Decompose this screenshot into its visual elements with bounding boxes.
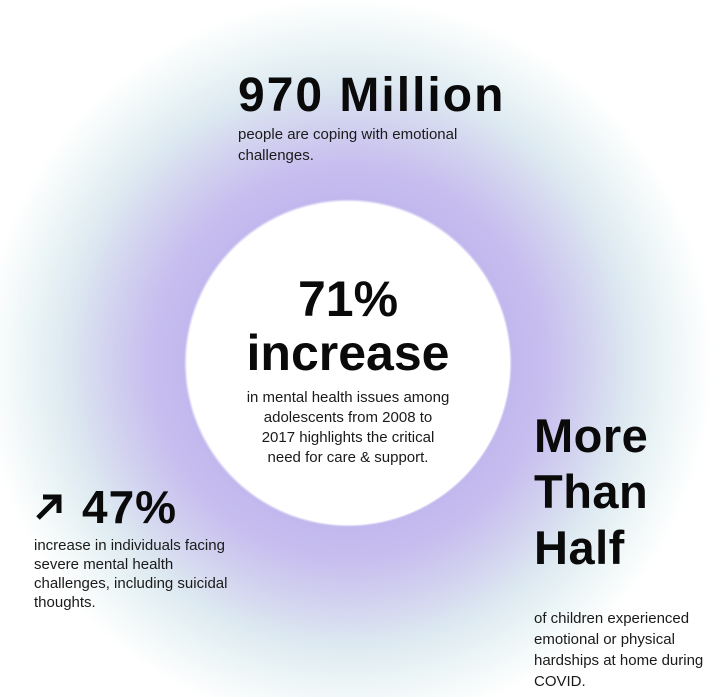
stat: More Than Half: COVID. [534, 673, 586, 690]
stat: 47%: 47% [82, 481, 177, 533]
stat: 47% [34, 481, 227, 611]
stat: 47%: challenges, including suicidal [34, 575, 227, 592]
stat: 71% increase: need for care & support. [268, 449, 428, 466]
stat: 71% increase: increase [247, 325, 449, 381]
icon: arrow up-right [36, 494, 62, 520]
stat: More Than Half: Than [534, 465, 648, 518]
stat: 970 Million [238, 69, 505, 164]
stat: 970 Million: challenges. [238, 147, 314, 164]
stat: 71% increase: adolescents from 2008 to [264, 409, 432, 426]
stat: More Than Half: More [534, 409, 648, 462]
stat: More Than Half: of children experienced [534, 610, 689, 627]
stat: 71% increase: 2017 highlights the critical [262, 429, 434, 446]
stat: More Than Half: emotional or physical [534, 631, 675, 648]
stat: 71% increase: in mental health issues among [247, 389, 449, 406]
stat: 47%: increase in individuals facing [34, 537, 225, 554]
stat: More Than Half: hardships at home during [534, 652, 703, 669]
stat: 970 Million: people are coping with emotional [238, 126, 457, 143]
stat: 71% increase: 71% [298, 271, 398, 327]
stat: 970 Million: 970 Million [238, 69, 505, 122]
stat: 71% increase [247, 271, 449, 466]
stat: More Than Half [534, 409, 703, 690]
stat: 47%: thoughts. [34, 594, 96, 611]
center circle [187, 202, 510, 525]
stat: 47%: severe mental health [34, 556, 173, 573]
stat: More Than Half: Half [534, 521, 625, 574]
